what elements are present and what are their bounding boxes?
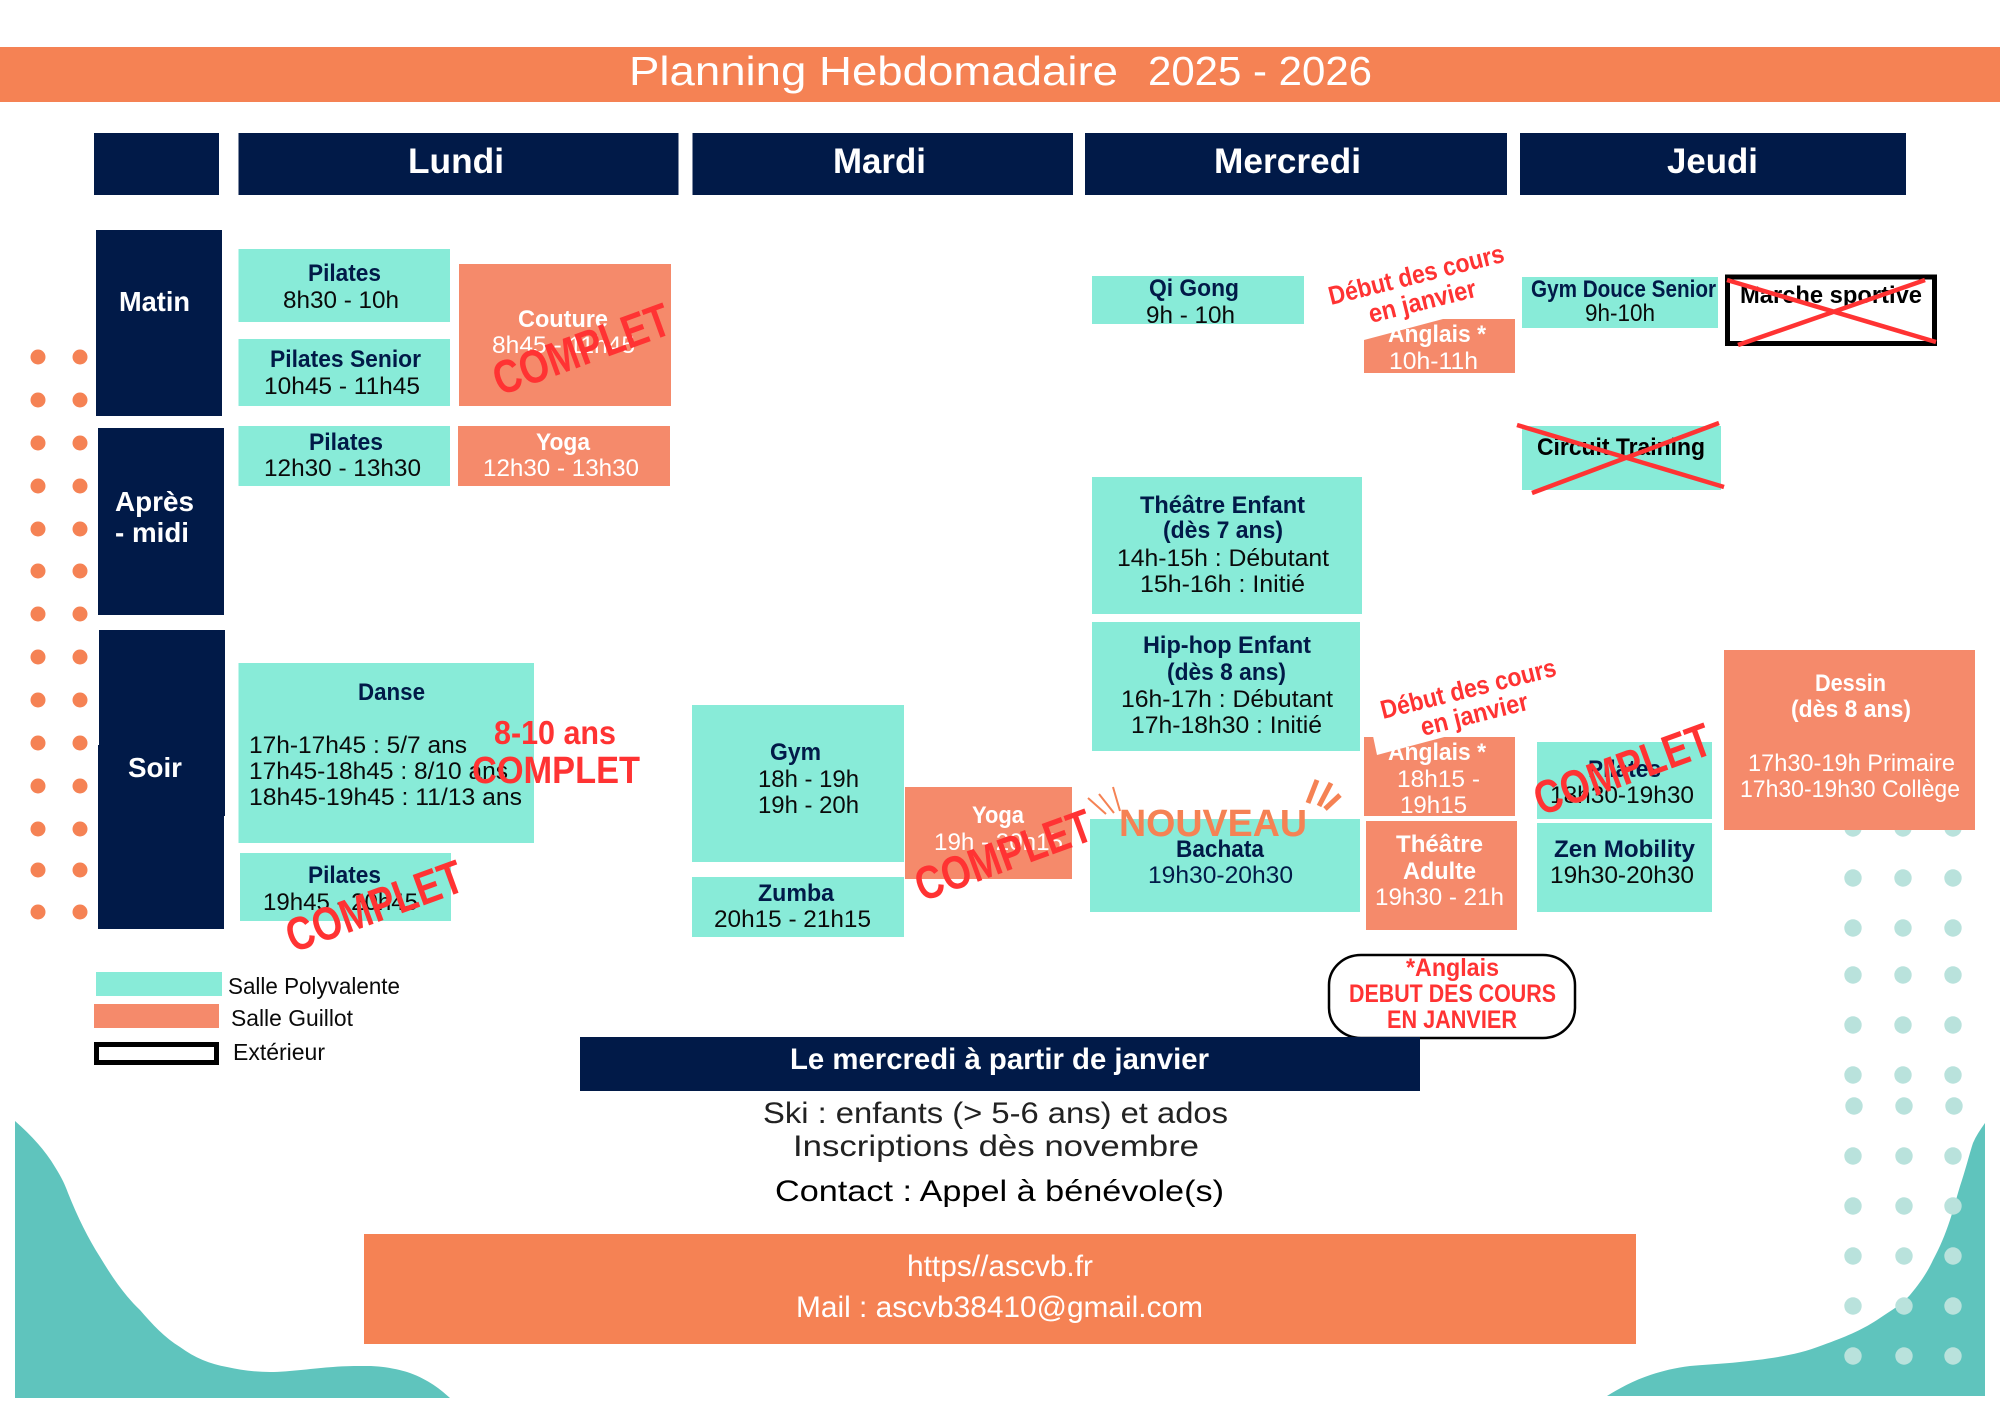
activity: Anglais 18h15: 19h15 <box>1400 792 1467 819</box>
decoration: teal wave bottom left <box>15 1121 450 1398</box>
note: début des cours en janvier (soir): Début des cours <box>1377 652 1559 725</box>
activity: Hip-hop Enfant <box>1092 622 1360 751</box>
activity: Marche sportive (cancelled) <box>1727 277 1936 345</box>
activity: Danse: Danse <box>358 679 425 706</box>
footer: site and mail: https//ascvb.fr <box>907 1250 1093 1283</box>
note: début des cours en janvier (soir): en janvier <box>1417 686 1531 742</box>
activity: Couture: Couture <box>518 306 608 333</box>
activity: Danse: 17h45-18h45 : 8/10 ans <box>249 758 508 785</box>
activity: Dessin: 17h30-19h30 Collège <box>1740 776 1960 803</box>
activity: Anglais 10h: 10h-11h <box>1389 348 1478 375</box>
callout: Anglais début des cours en janvier <box>1329 954 1575 1038</box>
activity: Pilates 18h30 <box>1537 742 1712 819</box>
activity: Pilates 8h30: Pilates <box>308 260 381 287</box>
activity: Gym Douce Senior <box>1522 276 1718 328</box>
banner: mercredi à partir de janvier <box>580 1037 1420 1091</box>
activity: Bachata: Bachata <box>1176 836 1265 863</box>
activity: Zen Mobility: 19h30-20h30 <box>1550 862 1694 889</box>
activity: Bachata <box>1090 819 1360 912</box>
activity: Anglais 10h: Anglais * <box>1388 321 1487 348</box>
activity: Qi Gong <box>1092 275 1304 329</box>
activity: Danse <box>238 663 534 843</box>
activity: Dessin: 17h30-19h Primaire <box>1748 750 1955 777</box>
header: empty corner cell <box>94 133 219 195</box>
text: ski: Inscriptions dès novembre <box>793 1130 1199 1163</box>
activity: Théâtre Enfant: 15h-16h : Initié <box>1140 571 1305 598</box>
footer: site and mail: Mail : ascvb38410@gmail.com <box>796 1291 1203 1324</box>
activity: Hip-hop Enfant: Hip-hop Enfant <box>1143 632 1311 659</box>
activity: Pilates 19h45: 19h45 - 20h45 <box>263 889 418 916</box>
legend <box>94 972 400 1065</box>
activity: Pilates 12h30: Pilates <box>309 429 383 456</box>
activity: Théâtre Enfant: 14h-15h : Débutant <box>1117 545 1329 572</box>
activity: Yoga 19h: 19h - 20h15 <box>934 829 1063 856</box>
activity: Théâtre Adulte: Théâtre <box>1396 831 1483 858</box>
activity: Yoga 12h30: 12h30 - 13h30 <box>483 455 639 482</box>
activity: Pilates 19h45: Pilates <box>308 862 381 889</box>
note: début des cours en janvier (matin) <box>1325 238 1507 329</box>
legend: Extérieur <box>96 1039 325 1065</box>
decoration: teal wave bottom right <box>1607 1123 1985 1396</box>
activity: Dessin <box>1724 650 1975 830</box>
header: Lundi <box>238 133 678 195</box>
note: 8-10 ans COMPLET: COMPLET <box>472 750 640 792</box>
stamp: COMPLET Couture: COMPLET <box>485 292 677 405</box>
icon: burst lines <box>1088 780 1340 814</box>
activity: Zen Mobility <box>1537 823 1712 912</box>
period: Matin <box>96 230 222 416</box>
badge: NOUVEAU: NOUVEAU <box>1119 803 1307 845</box>
note: 8-10 ans COMPLET <box>472 714 640 792</box>
decoration: pale teal dots right <box>1844 819 1963 1365</box>
title banner <box>0 47 2000 102</box>
activity: Anglais 18h15 <box>1364 736 1515 819</box>
activity: Marche sportive (cancelled): Marche sportive <box>1740 282 1922 309</box>
activity: Pilates 8h30 <box>238 249 450 322</box>
activity: Zumba: 20h15 - 21h15 <box>714 906 871 933</box>
activity: Zen Mobility: Zen Mobility <box>1554 836 1696 863</box>
period: Soir <box>98 630 225 929</box>
activity: Anglais 18h15: Anglais * <box>1388 739 1487 766</box>
badge: NOUVEAU <box>1088 780 1340 845</box>
activity: Gym: 18h - 19h <box>758 766 859 793</box>
title text: Planning Hebdomadaire <box>629 48 1118 94</box>
activity: Théâtre Adulte: Adulte <box>1403 858 1476 885</box>
icon: red cross <box>1517 423 1724 493</box>
stamp: COMPLET Yoga: COMPLET <box>907 798 1099 911</box>
legend: Extérieur: Extérieur <box>233 1039 325 1065</box>
legend: Salle Guillot <box>94 1004 354 1031</box>
header: Mercredi <box>1085 133 1507 195</box>
period: Soir: Soir <box>128 752 182 783</box>
period: Après-midi <box>98 428 224 615</box>
title text <box>629 48 1372 94</box>
activity: Circuit Training (cancelled): Circuit Training <box>1537 434 1705 461</box>
activity: Anglais 18h15: 18h15 - <box>1397 766 1480 793</box>
activity: Zumba <box>692 877 904 937</box>
text: contact: Contact : Appel à bénévole(s) <box>775 1175 1224 1208</box>
activity: Danse: 17h-17h45 : 5/7 ans <box>249 732 467 759</box>
activity: Zumba: Zumba <box>758 880 835 907</box>
activity: Anglais 10h <box>1364 319 1515 375</box>
period: Après-midi: - midi <box>115 517 189 548</box>
legend: Salle Polyvalente <box>96 972 400 999</box>
activity: Gym Douce Senior: 9h-10h <box>1585 300 1655 327</box>
callout: Anglais début des cours en janvier: *Anglais <box>1406 954 1499 982</box>
activity: Bachata: 19h30-20h30 <box>1148 862 1293 889</box>
icon: red cross <box>1727 280 1936 345</box>
legend: Salle Polyvalente: Salle Polyvalente <box>228 973 400 999</box>
activity: Circuit Training (cancelled) <box>1517 423 1724 493</box>
period: Après-midi: Après <box>115 486 194 517</box>
activity: Pilates Senior <box>238 339 450 406</box>
text: ski: Ski : enfants (> 5-6 ans) et ados <box>763 1097 1228 1130</box>
footer: site and mail <box>364 1234 1636 1344</box>
activity: Gym: Gym <box>770 739 821 766</box>
note: début des cours en janvier (matin): en janvier <box>1365 273 1479 329</box>
text: ski <box>763 1097 1228 1163</box>
activity: Dessin: Dessin <box>1815 670 1886 697</box>
decoration: orange dots left <box>30 350 88 920</box>
activity: Pilates 18h30: Pilates <box>1588 756 1661 783</box>
activity: Pilates 19h45 <box>240 853 451 921</box>
activity: Dessin: (dès 8 ans) <box>1791 696 1911 723</box>
activity: Gym: 19h - 20h <box>758 792 859 819</box>
activity: Hip-hop Enfant: 16h-17h : Débutant <box>1121 686 1333 713</box>
header: Jeudi <box>1520 133 1906 195</box>
stamp: COMPLET Pilates jeudi: COMPLET <box>1526 712 1718 825</box>
header: Jeudi: Jeudi <box>1667 142 1758 181</box>
banner: mercredi à partir de janvier: Le mercredi à partir de janvier <box>790 1043 1209 1076</box>
activity: Yoga 19h: Yoga <box>972 802 1025 829</box>
header: Mardi <box>692 133 1073 195</box>
activity: Yoga 19h <box>905 787 1072 879</box>
activity: Yoga 12h30: Yoga <box>536 429 591 456</box>
legend: Salle Guillot: Salle Guillot <box>231 1005 354 1031</box>
activity: Hip-hop Enfant: 17h-18h30 : Initié <box>1131 712 1322 739</box>
note: 8-10 ans COMPLET: 8-10 ans <box>494 714 616 751</box>
activity: Théâtre Adulte <box>1366 821 1517 930</box>
activity: Théâtre Enfant: (dès 7 ans) <box>1163 517 1283 544</box>
activity: Danse: 18h45-19h45 : 11/13 ans <box>249 784 522 811</box>
activity: Pilates 12h30 <box>238 426 450 486</box>
title text: 2025 - 2026 <box>1148 48 1372 94</box>
activity: Théâtre Enfant <box>1092 477 1362 614</box>
period: Matin: Matin <box>119 286 190 317</box>
activity: Couture: 8h45 - 11h45 <box>492 332 635 359</box>
activity: Pilates 8h30: 8h30 - 10h <box>283 287 399 314</box>
callout: Anglais début des cours en janvier: EN JANVIER <box>1387 1006 1517 1034</box>
activity: Pilates 18h30: 18h30-19h30 <box>1550 782 1694 809</box>
activity: Couture <box>459 264 671 406</box>
header: Mercredi: Mercredi <box>1214 142 1361 181</box>
activity: Pilates 12h30: 12h30 - 13h30 <box>264 455 421 482</box>
header: Lundi: Lundi <box>408 142 504 181</box>
activity: Pilates Senior: 10h45 - 11h45 <box>264 373 420 400</box>
activity: Hip-hop Enfant: (dès 8 ans) <box>1167 659 1286 686</box>
activity: Gym Douce Senior: Gym Douce Senior <box>1531 276 1716 303</box>
note: début des cours en janvier (soir) <box>1377 652 1559 742</box>
activity: Qi Gong: Qi Gong <box>1149 275 1239 302</box>
activity: Théâtre Adulte: 19h30 - 21h <box>1375 884 1504 911</box>
header: Mardi: Mardi <box>833 142 926 181</box>
activity: Yoga 12h30 <box>458 426 670 486</box>
activity: Théâtre Enfant: Théâtre Enfant <box>1140 492 1305 519</box>
callout: Anglais début des cours en janvier: DEBUT DES COURS <box>1349 980 1556 1008</box>
note: début des cours en janvier (matin): Début des cours <box>1325 238 1507 311</box>
stamp: COMPLET Pilates: COMPLET <box>278 849 470 962</box>
activity: Gym <box>692 705 904 862</box>
activity: Pilates Senior: Pilates Senior <box>270 346 421 373</box>
activity: Qi Gong: 9h - 10h <box>1146 302 1235 329</box>
